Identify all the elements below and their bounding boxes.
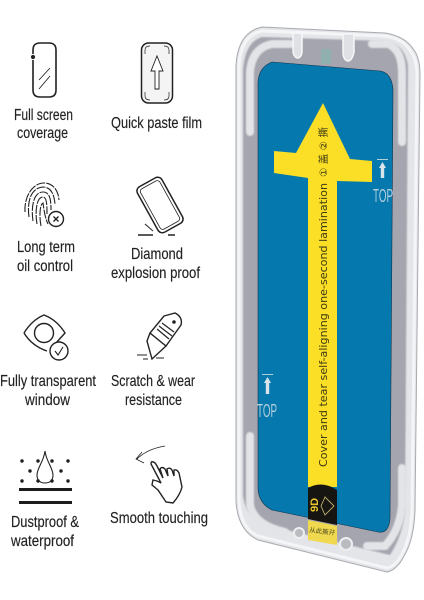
feature: quick paste film — [111, 43, 202, 132]
frame: clear outer rim highlight — [239, 31, 417, 568]
label: fully transparent window: Fully transparent — [0, 373, 96, 390]
frame: outer tray — [236, 27, 420, 572]
label: full screen coverage: Full screen — [14, 107, 73, 124]
feature: full screen coverage — [14, 43, 73, 142]
label: diamond explosion proof: explosion proof — [111, 265, 200, 282]
feature: diamond explosion proof — [111, 175, 200, 282]
pull tab: black 9D badge: 9D — [309, 498, 321, 512]
icon: swipe hand — [136, 446, 182, 503]
label: long term oil control: oil control — [17, 258, 73, 275]
icon: utility knife — [137, 313, 181, 359]
pull tab: vertical instruction text: Cover and tear self-aligning one-second lamination — [317, 183, 330, 467]
pull tab: black 9D badge — [308, 484, 337, 525]
feature: fully transparent window — [0, 315, 96, 409]
label: scratch and wear resistance: Scratch & wear — [111, 373, 196, 390]
label: full screen coverage: coverage — [17, 125, 68, 142]
feature: long term oil control — [17, 183, 75, 275]
frame: inner grey tray — [243, 37, 408, 555]
product: alignment frame with screen protector — [236, 27, 420, 572]
label: fully transparent window — [0, 373, 96, 409]
frame: bottom clip circles — [294, 528, 352, 550]
label: long term oil control: Long term — [17, 239, 75, 256]
pull tab: vertical instruction text: ① 盖 ② 撕 — [317, 127, 330, 177]
label: diamond explosion proof: Diamond — [131, 246, 183, 263]
marking: left TOP arrow: TOP — [257, 401, 277, 421]
pull tab: yellow peel tag — [308, 520, 337, 545]
feature: smooth touching — [110, 446, 208, 527]
label: scratch and wear resistance: resistance — [125, 392, 182, 409]
icon: eye with check — [24, 315, 68, 360]
label: dustproof and waterproof: waterproof — [10, 533, 74, 550]
icon: tilted phone impact — [135, 175, 185, 235]
feature: dustproof and waterproof — [10, 451, 79, 550]
label: quick paste film: Quick paste film — [111, 115, 202, 132]
icon: water drop and dust layers — [19, 451, 72, 504]
label: smooth touching: Smooth touching — [110, 510, 208, 527]
label: dustproof and waterproof — [10, 514, 79, 550]
pull tab: yellow peel tag: 从此撕开 — [309, 525, 336, 537]
icon: fingerprint with x — [25, 183, 64, 226]
marking: right TOP arrow — [373, 159, 393, 206]
arrow: yellow pull tab — [274, 103, 372, 487]
feature: scratch and wear resistance — [111, 313, 196, 409]
label: dustproof and waterproof: Dustproof & — [11, 514, 79, 531]
label: full screen coverage — [14, 107, 73, 142]
screen: blue protector film — [258, 62, 393, 532]
icon: phone screen — [32, 43, 56, 97]
frame: lighter left and right top guides — [250, 44, 402, 546]
icon: film with up arrow — [142, 43, 172, 103]
label: diamond explosion proof — [111, 246, 200, 282]
frame: top clip slots — [293, 33, 354, 61]
frame: top centre window — [321, 49, 331, 64]
label: fully transparent window: window — [24, 392, 70, 409]
marking: left TOP arrow — [257, 374, 277, 421]
label: long term oil control — [17, 239, 75, 275]
label: scratch and wear resistance — [111, 373, 196, 409]
marking: right TOP arrow: TOP — [373, 186, 393, 206]
